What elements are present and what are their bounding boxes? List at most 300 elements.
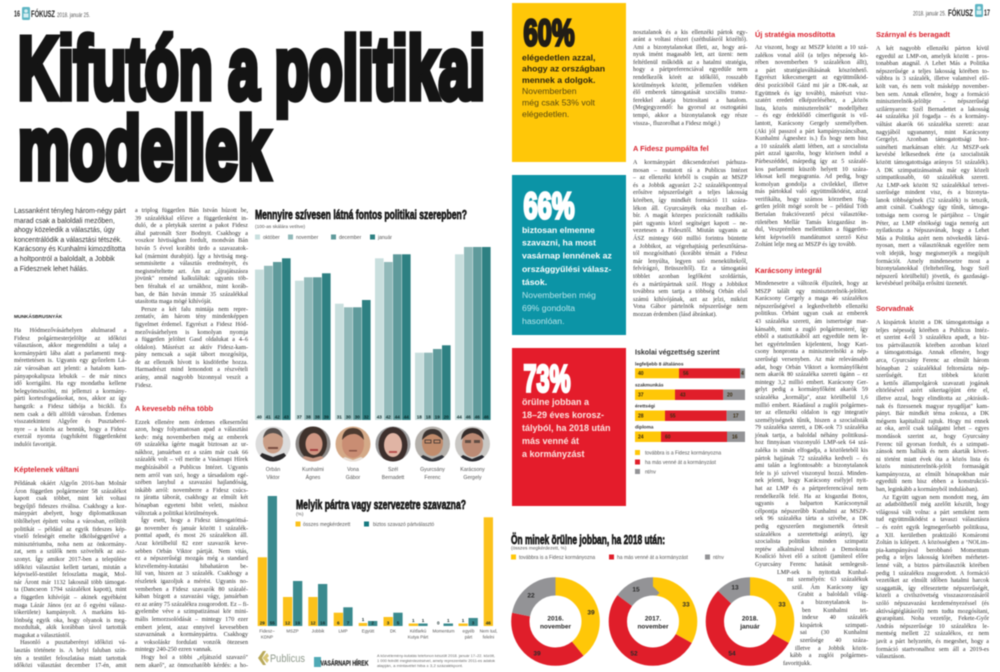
- column 1 body text: politikát – például az egyik fideszes kép-: [14, 527, 126, 533]
- column 2 upper text: pány nemcsak a saját tábort mozgósítja,: [135, 352, 248, 358]
- column 4 upper text: dési pozícióból Gázd mi jár a DK-nak, az: [755, 83, 868, 89]
- column 5 upper text: szerűsége mindent visz, és a bizonyta-: [876, 190, 989, 196]
- stat text: elégedetlen.: [522, 109, 569, 119]
- row: secondary: 55: [670, 414, 676, 420]
- column 5 lower text: pányt. Bár mindkét téma zokoza, a DK: [876, 411, 989, 417]
- portrait names: Ágnes: [306, 474, 321, 481]
- column 2 lower text: ra járatta táborát, csakhogy az elmúlt két: [135, 495, 248, 501]
- page header left: 2018. január 25.: [57, 13, 90, 19]
- bar values: 6: [337, 620, 340, 626]
- column 3 upper text: tempó, akkor a bizonytalanok egy része: [633, 113, 748, 119]
- stat text: más venné át: [522, 436, 579, 446]
- column 4 upper text: zalékos vonal alól (a teljes népesség kö-: [755, 53, 868, 59]
- column 1 intro text: pányapokalipsza lebukik – de már nincs: [14, 374, 126, 380]
- stat text: [522, 52, 605, 119]
- row: vocational: szakmunkás: [635, 382, 664, 388]
- donut 2017: 2017.: [645, 616, 661, 622]
- column 5 lower text: – és ezért egyik legmegerősebb politikusa,: [876, 525, 989, 531]
- column 2 lower text: ponttal apadt, és most 26 százalékon áll.: [135, 533, 248, 539]
- title: Kifutón a politikai: [18, 18, 485, 118]
- teal bars: [268, 496, 478, 626]
- stat text: vasárnap lennének az: [522, 250, 612, 260]
- donut 2018: 13: [731, 584, 739, 592]
- column 5 upper text: költ van, és nem volt másképp november-: [876, 84, 989, 90]
- column 5 upper text: tottsága nem csorog le pártjához – Ungár: [876, 213, 989, 219]
- bar values: 46: [466, 414, 471, 420]
- column 4 upper text: párt azzal igazolta, hogy közösen indul a: [755, 151, 868, 157]
- portrait names: Szél: [388, 467, 398, 473]
- portrait: Kunhalmi Ágnes: [295, 426, 331, 462]
- column 5 lower text: ni történt miatt évek óta a közös lista és: [876, 457, 989, 463]
- column 4 lower text: nem akarók 80 százaléka szereti ügánn – ez: [755, 372, 868, 378]
- row: secondary: érettségi: [635, 404, 655, 410]
- bar values: 7: [347, 620, 350, 626]
- column 4 lower text: mi személyén: 63 százalékuk: [787, 577, 868, 583]
- column 1 body text: begyűjtő fideszes riválisa. Csakhogy a kor-: [14, 504, 126, 510]
- row: degree: [635, 424, 745, 442]
- column 1 intro text: nyre – a közös az bennük, hogy a Fidesz: [14, 427, 126, 433]
- row: primary: 40: [638, 371, 644, 377]
- column 5 lower text: Ferenc túl gyorsan fordult, és a szimpati-: [876, 442, 989, 448]
- chart legend: ha más venné át a kormányzást: [645, 460, 716, 466]
- column 4 upper text: (Aki jól passzol a párt kampányszáncsíban,: [755, 129, 868, 135]
- row: primary: [635, 362, 745, 378]
- column 1 body text: zat, sem a szülők nem szövelték az asz-: [14, 549, 126, 555]
- row: degree: 16: [732, 434, 738, 440]
- column 2 lower text: hónapban egyeteni bibit veleti, máshoz Így esett, hogy a Fidesz támogatóttsá-: [135, 503, 248, 524]
- bar values: 29: [260, 620, 265, 626]
- chart legend: [511, 554, 724, 561]
- stat text: Novemberben: [522, 86, 577, 96]
- page header left: 16: [14, 10, 20, 18]
- column 4 lower text: százaléka „kormálja", azaz körülbelül 1,6: [755, 395, 868, 401]
- column 1 body text: magukat a választástól.: [14, 633, 71, 639]
- column 2 upper text: Fidesz.: [135, 383, 152, 389]
- chart: donuts: [511, 532, 786, 658]
- column 1 intro text: Ha Hódmezővásárhelyen alulmarad a: [14, 328, 126, 334]
- bar values: 32: [364, 414, 369, 420]
- donut 2018: 2018.: [742, 616, 758, 622]
- donut 2018: 33: [778, 602, 786, 608]
- column 2 upper text: Harmadrészt mind lemondott a részvételi: [135, 367, 248, 373]
- stat text: tályból, ha 2018 után: [522, 423, 611, 433]
- yellow bars: [258, 517, 493, 626]
- column 4 lower text: indexe 40 százalék: [802, 615, 868, 621]
- column 1 body text: mozdultak, akik korábban távol tartották Hasonló a pusztaberényi időközi vá-: [14, 625, 126, 646]
- bar values: 19: [435, 414, 440, 420]
- column 4 upper text: Kunhalmi Ágneshez is.) És hogy nem hisz: [755, 136, 868, 142]
- column 5 lower text: az oka, arról csak találgatni lehet – egyes: [876, 426, 989, 432]
- party names: MSZP: [286, 628, 299, 634]
- column 5 lower text: mentség mellett 22 százalékos, ez nem: [876, 631, 989, 637]
- donut 2017: 33: [682, 602, 690, 608]
- bar values: 1: [447, 618, 450, 623]
- column 5 upper text: kevésbé lelkesednek érte (a szocialisták: [876, 152, 989, 158]
- column 4 lower text: ebből a statisztikából azt egyedüle nem le-: [755, 334, 868, 340]
- column 3 upper text: aránt a voltasi részei (széthulásról közéltő).: [633, 37, 748, 43]
- donut 2016: 2016.: [547, 616, 564, 622]
- column 4 upper text: kos parlamenti küszöb helyett 10 száza-: [755, 166, 868, 172]
- column 2 upper text: mezővásárhelyen is komolyan nyomja: [135, 330, 248, 336]
- column 4 upper text: Bertalan frakcióvezető pécsi választóke-: [755, 212, 868, 218]
- column 5 lower text: tos pártválasztók körében azonban közel: [876, 343, 989, 349]
- column 4 lower text: kább a zuglói polgármes-: [790, 653, 868, 659]
- chart legend: összes megkérdezett: [303, 522, 351, 528]
- portrait: Gyurcsány Ferenc: [414, 426, 451, 462]
- Gyurcsány bars: [415, 345, 451, 420]
- column 5 upper text: A DK szimpatizánsainak már egy közeli: [876, 168, 989, 174]
- column 2 lower text: szavaznának a kormánypártra. Csakhogy: [135, 632, 248, 638]
- bar values: 18: [417, 414, 422, 420]
- stat text: hasonlóan.: [522, 316, 565, 326]
- portrait names: Viktor: [266, 475, 280, 481]
- portrait: Orbán Viktor: [255, 426, 291, 462]
- column 4 upper text: rében novemberben 9 százalékon állt),: [755, 60, 868, 66]
- column 5 upper text: bizonytalanokkal (feltehetőleg, hogy Szél: [876, 266, 989, 272]
- chart legend: október: [263, 235, 280, 241]
- column 4 lower text: millió embert. Ráadásul a zuglói polgármes-: [755, 402, 868, 408]
- bar values: 30: [346, 414, 351, 420]
- column 2 lower text: nem akarő", az önmozhatóbb kérdés: a ho-: [135, 662, 248, 668]
- column 4 lower text: százalékos a szeretettségi arányt), így: [755, 532, 868, 538]
- bar values: 30: [355, 414, 360, 420]
- page header right: 2018. január 25.: [913, 12, 946, 18]
- column 5 lower text: mondások szerint az, hogy Gyurcsány: [876, 434, 989, 440]
- stat text: 18–29 éves korosz-: [522, 410, 604, 420]
- column 4 lower text: pedig egyszerűen megismerték őrtesít: [755, 524, 868, 530]
- column 3 lower text: mozzan érdemben (lásd ábránkat).: [633, 312, 717, 318]
- column 4 lower text: jónak tartja, a baloldal néhány politikusá-: [755, 433, 868, 439]
- column 4 lower text: Koalíció hívei elő a szított (jamíteol előre: [755, 554, 868, 560]
- Karácsony bars: [455, 247, 491, 420]
- column 1 intro text: indulói favoritját.: [14, 442, 57, 448]
- chart legend: továbbra is a Fidesz kormányozna: [519, 555, 595, 561]
- donut 2017: november: [637, 624, 669, 630]
- row: primary: legfeljebb 8 általános: [635, 362, 684, 368]
- column 3 upper text: vissza-, fluzorolhat a Fidesz mögé.): [633, 121, 720, 127]
- portrait: Karácsony Gergely: [454, 426, 491, 462]
- column 5 lower text: eltörlésével azért sikertagójúnt érte el,: [876, 388, 989, 394]
- bar values: 3: [387, 620, 390, 626]
- column 4 lower text: személyiségnek tűnik, hiszen a szocialisták: [755, 418, 868, 424]
- column 4 lower text: hoz finnyásan viszonyuló LMP-sek 64 szá-: [755, 440, 868, 446]
- column 5 upper text: miniszterelnök-jelöltje - népszerűségi: [876, 99, 989, 105]
- panel: yellow stat: [512, 3, 626, 162]
- chart heading: Mennyire szívesen látná fontos politikai szerepben?: [255, 207, 467, 222]
- column 4 upper text: Párbeszéddel, márpedig így az 5 százalé-: [755, 159, 868, 165]
- heading: Karácsony integrál: Karácsony integrál: [755, 266, 822, 274]
- stat text: országgyűlési válasz-: [522, 264, 611, 274]
- column 3 lower text: bír. A magát közepes pozícionált radikális: [633, 213, 748, 219]
- chart: party preference bars: [258, 496, 497, 640]
- column 5 upper text: lanok többségének (52 százalék) is tetszik,: [876, 198, 989, 204]
- chart: education stacked bars: [635, 350, 745, 476]
- column 3 upper text: [632, 29, 748, 128]
- logo: Vasárnapi Hírek: [314, 657, 369, 668]
- stat text: még csak 53% volt: [522, 98, 595, 108]
- party names: Együtt: [362, 628, 375, 634]
- column 4 lower text: kánsabb, mint a zugló polgármesteré, így: [755, 327, 868, 333]
- column 1 body text: lasztás története is. A helyi faluban szín-: [14, 648, 126, 654]
- methodology note: [377, 654, 495, 668]
- column 2 upper text: jövünk" reménd kalkuláltak: ugyanis töb-: [135, 276, 248, 282]
- column 3 lower text: többlet azonban legfőként szoldáritás,: [633, 274, 748, 280]
- row: primary: 4: [741, 371, 744, 377]
- column 2 lower text: lül van, hiszen az 3 százalék. Csakhogy a: [135, 571, 248, 577]
- stat text: tások.: [522, 277, 547, 287]
- column 3 upper text: rendelkezők körét az időkőlő, rosszabb: [633, 75, 748, 81]
- column 3 lower text: – az ellenzéki körből is csupán az MSZP: [633, 175, 748, 181]
- column 4 lower text: szül. Ám Karácsony így: [792, 585, 868, 591]
- column 2 upper text: megismételtette azt. Ám az „újrajátszásra: [135, 269, 248, 275]
- column 4 lower text: MSZP talált egy miniszterelnök-jelöltet.: [755, 289, 868, 295]
- stat text: elégedetlen azzal,: [522, 52, 595, 62]
- column 2 upper text: által patronált Szer Bodnyit. Csakhogy a: [135, 231, 248, 237]
- column 4 upper text: Egyrészt kikecsmergett az együttműköd-: [755, 75, 868, 81]
- column 5 upper text: váltást akarók 66 százaléka szereti: azaz: [876, 122, 989, 128]
- bar values: 42: [275, 414, 280, 420]
- logo: Publicus: [258, 651, 305, 665]
- column 4 lower text: ugyanis a balparton Karácsonynál: [755, 501, 868, 507]
- column 1 body text: minisztériumba, noha nem az önkormány-: [14, 542, 126, 548]
- bar values: 44: [395, 414, 400, 420]
- column 5 lower text: közeli a civilszövetség visszaszorozásáról: [876, 593, 989, 599]
- column 4 upper text: más pártokkal való együttműködést, azzal: [755, 189, 868, 195]
- column 5 lower text: zánsok nem hallták és nem akarták követ-: [876, 449, 989, 455]
- title: [18, 18, 485, 198]
- row: degree: 24: [638, 434, 644, 440]
- lead paragraph: Karácsony és Kunhalmi kimozdította: [14, 246, 125, 253]
- donut 2016: november: [540, 624, 571, 630]
- bar values: 1: [362, 617, 365, 622]
- bar values: 20: [444, 414, 449, 420]
- column 3 upper text: feltétlenül működik az a hatalmi stratégia,: [633, 60, 748, 66]
- lead paragraph: Lassanként tényleg három-négy párt: [14, 208, 126, 215]
- methodology note: alapján, a mintavétel hiba ± 3,2 százalékpont.: [377, 664, 463, 668]
- column 5 upper text: népszerűsége a teljes lakosság körében to-: [876, 69, 989, 75]
- column 3 lower text: Vona Gábor pártelnök népszerűsége nem: [633, 304, 748, 310]
- column 5 lower text: szaggatták, így elfeseztette népszerűségét,: [876, 586, 989, 592]
- column 3 lower text: párt ugyanis közel segítséget kapott – ne-: [633, 221, 748, 227]
- column 5 lower text: tud együttműködést a tavaszi választásra: [876, 517, 989, 523]
- column 5 lower text: lenné vált, a biztos pártválasztók körében: [876, 563, 989, 569]
- column 1 body text: ta (Dancseon 1794 százalékot kapott), mint: [14, 587, 126, 593]
- column 5 upper text: formációt. Amely mindenesetre most a: [876, 259, 989, 265]
- column 5 lower text: pedig 1 százalékra zsugorodott. A formáció: [876, 571, 989, 577]
- column 3 lower text: és a mártírpártnak szól. Hogy a Jobbikot: [633, 282, 748, 288]
- column 3 upper text: élő emberek támogatását szociális transz-: [633, 90, 748, 96]
- heading: A kevesebb néha több: A kevesebb néha több: [135, 404, 213, 412]
- column 4 upper text: – és egy érdeklődő címerfigurát is vil-: [755, 113, 868, 119]
- column 2 lower text: Ezzek ellenére nem érdemes elkesernőni: [135, 420, 248, 426]
- donut 2017: [618, 586, 690, 658]
- column 5 upper text: vábbra is 3 százalék, illetve valamivel elő-: [876, 76, 989, 82]
- column 1 body text: töltőhelyet épített volna a városban, erőltölt: [14, 519, 126, 525]
- column 1 body text: Példának okáért Algyőn 2016-ban Molnár: [14, 481, 126, 487]
- chart legend: ha más venné át a kormányzást: [617, 555, 688, 561]
- column 5 upper text: volt idejük, hogy megismerjék a megújult: [876, 251, 989, 257]
- column 2 upper text: de az ellenzék hívott is kisdöfetbe hozza.: [135, 360, 248, 366]
- column 4 lower text: reptéw alkalmával kihozó a Demokrata: [755, 547, 868, 553]
- stat number: 60%: [524, 12, 574, 54]
- column 5 upper text: egyedül az LMP-on, amelyik között - pros-: [876, 54, 989, 60]
- column 2 lower text: [134, 418, 249, 668]
- portrait names: Orbán: [266, 467, 280, 473]
- column 3 upper text: körülmények között, jellemzően vidéken: [633, 83, 748, 89]
- column 4 lower text: adat, hogy Orbán Viktort a kormányfőként: [755, 365, 868, 371]
- column 1 body text: nár Áront már 1132 lakosnál több támogat-: [14, 580, 126, 586]
- column 4 lower text: LMP-sek is nyitottak Kunhal-: [777, 570, 868, 576]
- column 1 intro text: hangzik: a Fidesz táthója a bicikli. És: [14, 404, 126, 410]
- portrait: Szél Bernadett: [375, 426, 411, 463]
- lead paragraph: koncentrálódik a választási tétszék.: [14, 237, 122, 244]
- column 5 lower text: gyarapítani. Noha vezetője, Fekete-Győr: [876, 616, 989, 622]
- column 2 lower text: közvélemény-kutatási hibahatáron be-: [135, 564, 248, 570]
- donut 2016: [520, 586, 595, 658]
- party names: DK: [390, 628, 396, 634]
- row: degree: diploma: [635, 424, 654, 430]
- page header right: [913, 4, 990, 19]
- column 5 upper text: nyosan, mert a választóknak egyelőre nem: [876, 243, 989, 249]
- column 1 body text: kapott csak többet, mint két voltasi: [14, 496, 126, 502]
- row: secondary: 17: [733, 414, 739, 420]
- chart heading: Ön minek örülne jobban, ha 2018 után:: [511, 532, 665, 547]
- column 2 upper text: kal (mármint durabjút). Így a hivtiság meg-: [135, 254, 248, 260]
- portrait names: Gyurcsány: [420, 467, 445, 473]
- portrait names: Gergely: [463, 475, 482, 481]
- row: degree: 60: [665, 434, 671, 440]
- bar values: 2: [371, 620, 374, 626]
- bar values: 1: [462, 618, 465, 623]
- bar values: 44: [404, 414, 409, 420]
- row: vocational: [635, 382, 745, 400]
- column 3 lower text: továbbra sem tartja a többség Orbán első: [633, 289, 748, 295]
- column 4 upper text: Együttnek és így tovább), másrészt visz-: [755, 91, 868, 97]
- bar values: 19: [295, 620, 301, 626]
- column 4 lower text: rendelkezők felé. Ha az kisgazdai Botos,: [755, 494, 868, 500]
- bar values: 31: [337, 414, 342, 420]
- donut 2016: 39: [587, 610, 595, 616]
- column 1 intro text: párti kortesfogadásokat, nos, akkor az így: [14, 396, 126, 402]
- column 2 lower text: kedv: még novemberben még az emberek: [135, 435, 248, 441]
- column 3 lower text: számú kihívójának, azt az jelzi, miközt: [633, 297, 748, 303]
- column 5 upper text: nagyjából ugyanannyi, mint Karácsony: [876, 130, 989, 136]
- column 5 lower text: arca, Gyurcsány Ferenc az elmúlt három: [876, 358, 989, 364]
- stat number: 73%: [524, 358, 570, 400]
- column 4 lower text: fele is jó szívvel viszonyul hozzá. Minden-: [755, 471, 868, 477]
- donut 2018: 54: [728, 650, 736, 658]
- portrait names: Vona: [347, 467, 359, 473]
- stat text: örülne jobban a: [522, 397, 590, 407]
- column 4 upper text: lantott, Karácsony Gergely személyében.: [755, 121, 868, 127]
- column 5 lower text: [875, 319, 990, 660]
- portrait names: Bernadett: [382, 475, 405, 481]
- column 4 upper text: lékosat kell megugrania. Ad pedig, hogy: [755, 174, 868, 180]
- stat text: [522, 225, 612, 326]
- column 4 upper text: ként képviselői mandátumot szerző Kész: [755, 235, 868, 241]
- column 5 lower text: pia-kampányával berobbanó Momentum: [876, 548, 989, 554]
- column 1 body text: tókerülete) kampányolt. A markáns kü-: [14, 610, 126, 616]
- bar values: 18: [426, 414, 431, 420]
- portrait names: Karácsony: [460, 467, 485, 473]
- column 4 upper text: a párt stratégiaváltásának köszönhető.: [755, 68, 868, 74]
- party names: [259, 628, 497, 640]
- column 1 intro text: idő korrigálni. Ha egy mondatba kellene: [14, 381, 126, 387]
- column 4 upper text: dul, Veszprémben mellettükm a független-: [755, 227, 868, 233]
- column 3 upper text: nyuk imént magasabb lett, azt üzeni: nem: [633, 52, 748, 58]
- column 4 upper text: getlen jelölt mögé sorolt be – például Tóth: [755, 204, 868, 210]
- column 5 lower text: András népszerűsége 10 százalékra le-: [876, 624, 989, 630]
- column 5 lower text: ban, leginkább a kormányból indulásban).: [876, 487, 979, 493]
- column 5 lower text: javít a párt helyzetén, és megeshet, hogy a: [876, 639, 989, 645]
- column 4 lower text: ami talán a legfontosabb: a bizonytalanok: [755, 463, 868, 469]
- column 2 upper text: [134, 207, 249, 389]
- column 4 upper text: [754, 44, 868, 248]
- bar values: 42: [386, 414, 391, 420]
- chart subtitle: (100-as skálára vetítve): [255, 224, 306, 230]
- chart heading: Melyik pártra vagy szervezetre szavazna?: [296, 497, 466, 512]
- byline: MUNKÁSBRUSNYÁK: [14, 315, 62, 320]
- column 4 upper text: verifikálta, hogy számos körzetben füg-: [755, 197, 868, 203]
- portrait names: Kunhalmi: [302, 467, 324, 473]
- bar values: 46: [484, 414, 489, 420]
- bar values: 12: [285, 620, 291, 626]
- column 4 lower text: 43 százaléka szereti, ám ismertsége mar-: [755, 319, 868, 325]
- column 5 lower text: hónapban 2 százalékkal feltornázta nép-: [876, 366, 989, 372]
- column 5 lower text: világossá vált volna: a párt semiként nem: [876, 510, 989, 516]
- column 4 lower text: politikus. Orbánt ugyan csak az emberek: [755, 311, 868, 317]
- column 1 body text: Áron független polgármester 58 százalékot: [14, 489, 126, 495]
- party names: Jobbik: [312, 628, 325, 634]
- row: vocational: 37: [638, 392, 644, 398]
- bar values: 16: [320, 620, 326, 626]
- bar values: 39: [324, 414, 329, 420]
- column 2 upper text: ben féraltak el az urnákhoz, mint koráb-: [135, 284, 248, 290]
- stat text: Novemberben még: [522, 290, 596, 300]
- column 2 lower text: mális lemorzsolódását – mintegy 170 ezer: [135, 617, 248, 623]
- column 4 lower text: [754, 280, 869, 667]
- column 5 upper text: ben sem. Annak ellenére, hogy a formáció: [876, 92, 989, 98]
- column 1 intro text: exerzál nyomta (ugyhiként függetlenként: [14, 434, 126, 440]
- heading: Képtelenek váltani: Képtelenek váltani: [14, 464, 79, 474]
- heading: Szárnyal és beragadt: Szárnyal és beragadt: [876, 30, 950, 38]
- column 2 upper text: István 5 évvel korábbi ürdo a szavazatok-: [135, 246, 248, 252]
- stat text: mennek a dolgok.: [522, 75, 595, 85]
- column 5 upper text: Az LMP-sek között 92 százalékkal tetvei-: [876, 183, 989, 189]
- bar values: 38: [306, 414, 311, 420]
- column 5 lower text: vezetőket az elmúlt időben hatalmi harcok: [876, 578, 989, 584]
- column 4 lower text: szerűségi versenyben. Az már relevánsabb: [755, 357, 868, 363]
- bar values: 12: [310, 620, 316, 626]
- column 5 lower text: aktívságtéglátásról) nem tudta mozgósítani,: [876, 609, 989, 615]
- bar values: 40: [257, 414, 262, 420]
- column 1 intro text: [14, 326, 127, 448]
- party names: felelni: [483, 634, 494, 640]
- column 3 upper text: Ami a bizonytalanokat illeti, az, hogy ará-: [633, 45, 748, 51]
- donut 2017: 52: [630, 650, 638, 658]
- column 2 lower text: részletek igazoljuk a mérést. Ugyanis no-: [135, 579, 248, 585]
- column 2 lower text: változtak a politikai körülmények.: [135, 511, 219, 517]
- column 5 lower text: nak és fizessenek magyar nyugdíjat" kam-: [876, 404, 989, 410]
- chart legend: biztos szavazó pártválasztó: [373, 522, 434, 528]
- bar values: 38: [315, 414, 320, 420]
- column 1 intro text: belegyömöszölni, mi jellemzi a kormány-: [14, 389, 126, 395]
- column 1 body text: maga Lázár János (ez az ő egyéni válasz-: [14, 602, 126, 608]
- donut 2018: [715, 584, 786, 658]
- column 5 lower text: közös miniszterelnök-jelölt formaságát: [876, 464, 989, 470]
- column 2 lower text: gyelembe véve a szimpatizánsai kör mini-: [135, 609, 248, 615]
- column 2 lower text: nákhoz, januárban ez a szám már csak 66: [135, 450, 248, 456]
